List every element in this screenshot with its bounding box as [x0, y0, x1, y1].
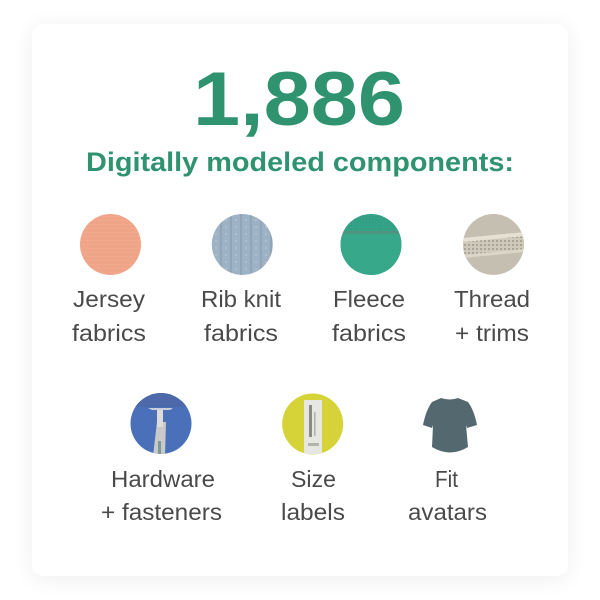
item: hardware and fasteners [101, 393, 222, 525]
item: fit avatars [408, 398, 487, 525]
item: fleece fabrics [332, 214, 406, 346]
icon: fleece swatch [340, 214, 402, 276]
label: fleece fabrics: fabrics [332, 320, 406, 346]
icon: zipper swatch [130, 393, 192, 456]
icon: jersey swatch [80, 214, 141, 275]
item: rib knit fabrics [201, 214, 282, 346]
infographic content [72, 72, 528, 520]
label: hardware and fasteners: Hardware [111, 466, 215, 492]
item: thread and trims [454, 214, 530, 346]
icon: size label swatch [282, 393, 344, 455]
label: thread and trims: + trims [455, 320, 529, 346]
icon: trim swatch [463, 214, 525, 275]
label: hardware and fasteners: + fasteners [101, 499, 222, 525]
label: size labels: labels [281, 499, 345, 525]
label: rib knit fabrics: fabrics [204, 320, 278, 346]
item: size labels [281, 393, 345, 525]
icon: t-shirt [423, 398, 477, 452]
label: jersey fabrics: fabrics [72, 320, 146, 346]
label: fleece fabrics: Fleece [333, 286, 405, 312]
label: rib knit fabrics: Rib knit [201, 286, 282, 312]
label: fit avatars: avatars [408, 499, 487, 525]
icon: rib knit swatch [212, 214, 273, 275]
label: jersey fabrics: Jersey [73, 286, 146, 312]
label: thread and trims: Thread [454, 286, 530, 312]
label: size labels: Size [291, 466, 336, 492]
label: fit avatars: Fit [435, 466, 459, 492]
item: jersey fabrics [72, 214, 146, 346]
subtitle: Digitally modeled components: [86, 147, 514, 177]
title: 1,886: 1,886 [193, 57, 405, 142]
